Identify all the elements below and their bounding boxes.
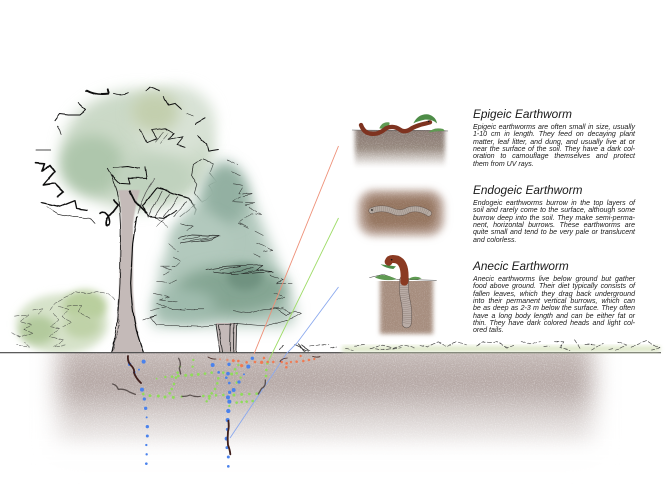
full illustration xyxy=(0,80,662,468)
description: anecic: into their permanent vertical burrows, which can xyxy=(473,298,635,305)
description: endogeic: burrow deep into the soil. They make semi-perma- xyxy=(473,215,635,222)
icon: endogeic worm xyxy=(350,182,450,242)
ground line xyxy=(0,352,661,354)
conifer trunk xyxy=(216,323,236,353)
blue burrow dots xyxy=(128,357,254,468)
blue pointer line xyxy=(230,287,338,438)
description: endogeic: soil and rarely come to the surface, although some xyxy=(473,207,635,214)
red pointer line xyxy=(254,146,338,354)
description: endogeic: and colorless. xyxy=(473,237,516,244)
tree canopy wash xyxy=(60,86,215,210)
text block: anecic xyxy=(472,259,636,334)
pointer lines xyxy=(230,146,338,438)
description: anecic: Anecic earthworms live below ground but gather xyxy=(473,276,635,283)
description: anecic: be as deep as 2-3 m below the surface. They often xyxy=(473,305,635,312)
tree trunk xyxy=(112,190,143,353)
worms in soil xyxy=(113,356,320,454)
icon: conifer tree xyxy=(143,158,302,353)
description: epigeic: 1-10 cm in length. They feed on decaying plant xyxy=(473,131,635,138)
canopy outline strokes xyxy=(87,89,108,95)
description: endogeic: nent, horizontal burrows. These earthworms are xyxy=(473,222,635,229)
burrow maps xyxy=(113,355,320,468)
shrub foliage wash xyxy=(16,290,108,354)
description: anecic: fallen leaves, which they drag back underground xyxy=(473,291,635,298)
description: anecic xyxy=(472,276,636,334)
orange burrow dots xyxy=(219,355,315,368)
description: epigeic xyxy=(473,124,636,168)
heading: endogeic: Endogeic Earthworm xyxy=(473,183,583,197)
description: endogeic: quite small and tend to be very pale or translucent xyxy=(473,229,635,236)
grass strip xyxy=(280,340,660,352)
green burrow dots xyxy=(142,359,268,407)
text block: endogeic xyxy=(473,183,636,244)
description: endogeic xyxy=(473,200,636,244)
icon: broadleaf tree xyxy=(36,86,218,353)
conifer foliage wash xyxy=(152,158,296,326)
description: epigeic: oration to camouflage themselves and protect xyxy=(473,153,635,160)
description: epigeic: matter, leaf litter, and dung, and usually live at or xyxy=(473,139,635,146)
text block: epigeic xyxy=(473,107,636,168)
description: epigeic: near the surface of the soil. They have a dark col- xyxy=(473,146,635,153)
heading: anecic: Anecic Earthworm xyxy=(473,259,569,273)
green pointer line xyxy=(268,218,338,362)
icon: epigeic worm xyxy=(350,114,450,167)
description: endogeic: Endogeic earthworms burrow in the top layers of xyxy=(473,200,635,207)
endogeic soil patch xyxy=(358,190,444,236)
icon: anecic worm xyxy=(369,259,440,341)
icon: shrub xyxy=(12,290,119,354)
heading: epigeic: Epigeic Earthworm xyxy=(473,107,572,121)
anecic soil patch xyxy=(380,276,433,334)
description: anecic: have a long body length and can be either fat or xyxy=(473,313,635,320)
description: anecic: thin. They have dark colored heads and light col- xyxy=(473,320,635,327)
description: epigeic: them from UV rays. xyxy=(473,161,534,168)
epigeic soil patch xyxy=(355,125,445,167)
description: anecic: ored tails. xyxy=(473,327,504,334)
soil cross-section xyxy=(43,353,608,446)
description: epigeic: Epigeic earthworms are often small in size, usually xyxy=(473,124,635,131)
description: anecic: food above ground. Their diet typically consists of xyxy=(473,283,635,290)
